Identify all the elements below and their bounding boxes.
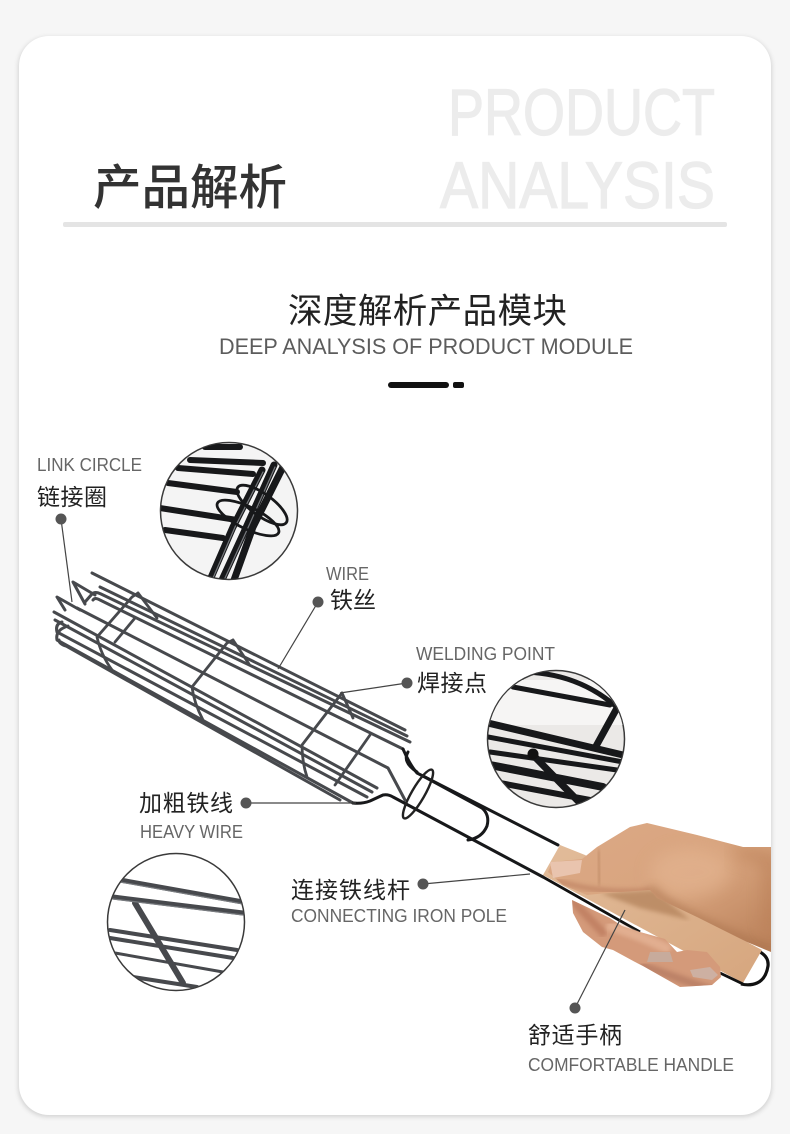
- callout: connecting iron pole: CONNECTING IRON POLE: [291, 906, 507, 926]
- illustration: grill basket: [54, 573, 558, 877]
- callout: wire: 铁丝: [330, 581, 376, 615]
- lower wires and rounded end: [54, 612, 377, 803]
- callout: comfortable handle: COMFORTABLE HANDLE: [528, 1055, 734, 1075]
- callout: link circle: LINK CIRCLE: [37, 455, 142, 475]
- callout: link circle: 链接圈: [37, 478, 107, 512]
- watermark title: product analysis: [440, 75, 715, 222]
- cross hoops: [97, 593, 370, 785]
- callout: comfortable handle: 舒适手柄: [528, 1016, 622, 1050]
- neck and handle rods: [353, 749, 558, 877]
- callout: heavy wire: [139, 784, 356, 842]
- accent bars: [388, 382, 464, 388]
- illustration: hand and wooden handle: [543, 823, 771, 990]
- callout: wire: [278, 564, 376, 669]
- middle wire: [77, 608, 405, 800]
- callout: heavy wire: HEAVY WIRE: [140, 822, 243, 842]
- detail circle: heavy wire: [108, 854, 244, 990]
- title: 产品解析: [93, 148, 287, 218]
- watermark title: product analysis: PRODUCT: [448, 75, 715, 149]
- subtitle: DEEP ANALYSIS OF PRODUCT MODULE: [219, 334, 633, 359]
- thumb nail: [550, 860, 582, 878]
- callout: heavy wire: 加粗铁线: [139, 784, 233, 818]
- upper hand: [548, 823, 771, 952]
- detail circle: welding point: [488, 670, 625, 808]
- callout: connecting iron pole: [291, 871, 530, 926]
- callout: welding point: [340, 644, 555, 698]
- callout: link circle: [37, 455, 142, 602]
- upper wires: [57, 573, 410, 749]
- end loop: [741, 952, 768, 985]
- lower fingers: [572, 900, 721, 990]
- detail circle: link circle: [160, 442, 298, 580]
- callout: comfortable handle: [528, 910, 734, 1075]
- subtitle: [219, 283, 633, 359]
- rod along handle: [543, 877, 743, 984]
- callout: welding point: WELDING POINT: [416, 644, 555, 664]
- callout: connecting iron pole: 连接铁线杆: [291, 871, 410, 905]
- callout: welding point: 焊接点: [417, 664, 487, 698]
- callout: wire: WIRE: [326, 564, 369, 584]
- watermark title: product analysis: ANALYSIS: [440, 148, 715, 222]
- header rule: [63, 222, 727, 227]
- ring: [398, 767, 438, 821]
- hand shadow on wood: [600, 890, 690, 920]
- subtitle: 深度解析产品模块: [288, 283, 567, 333]
- wooden handle: [543, 845, 762, 983]
